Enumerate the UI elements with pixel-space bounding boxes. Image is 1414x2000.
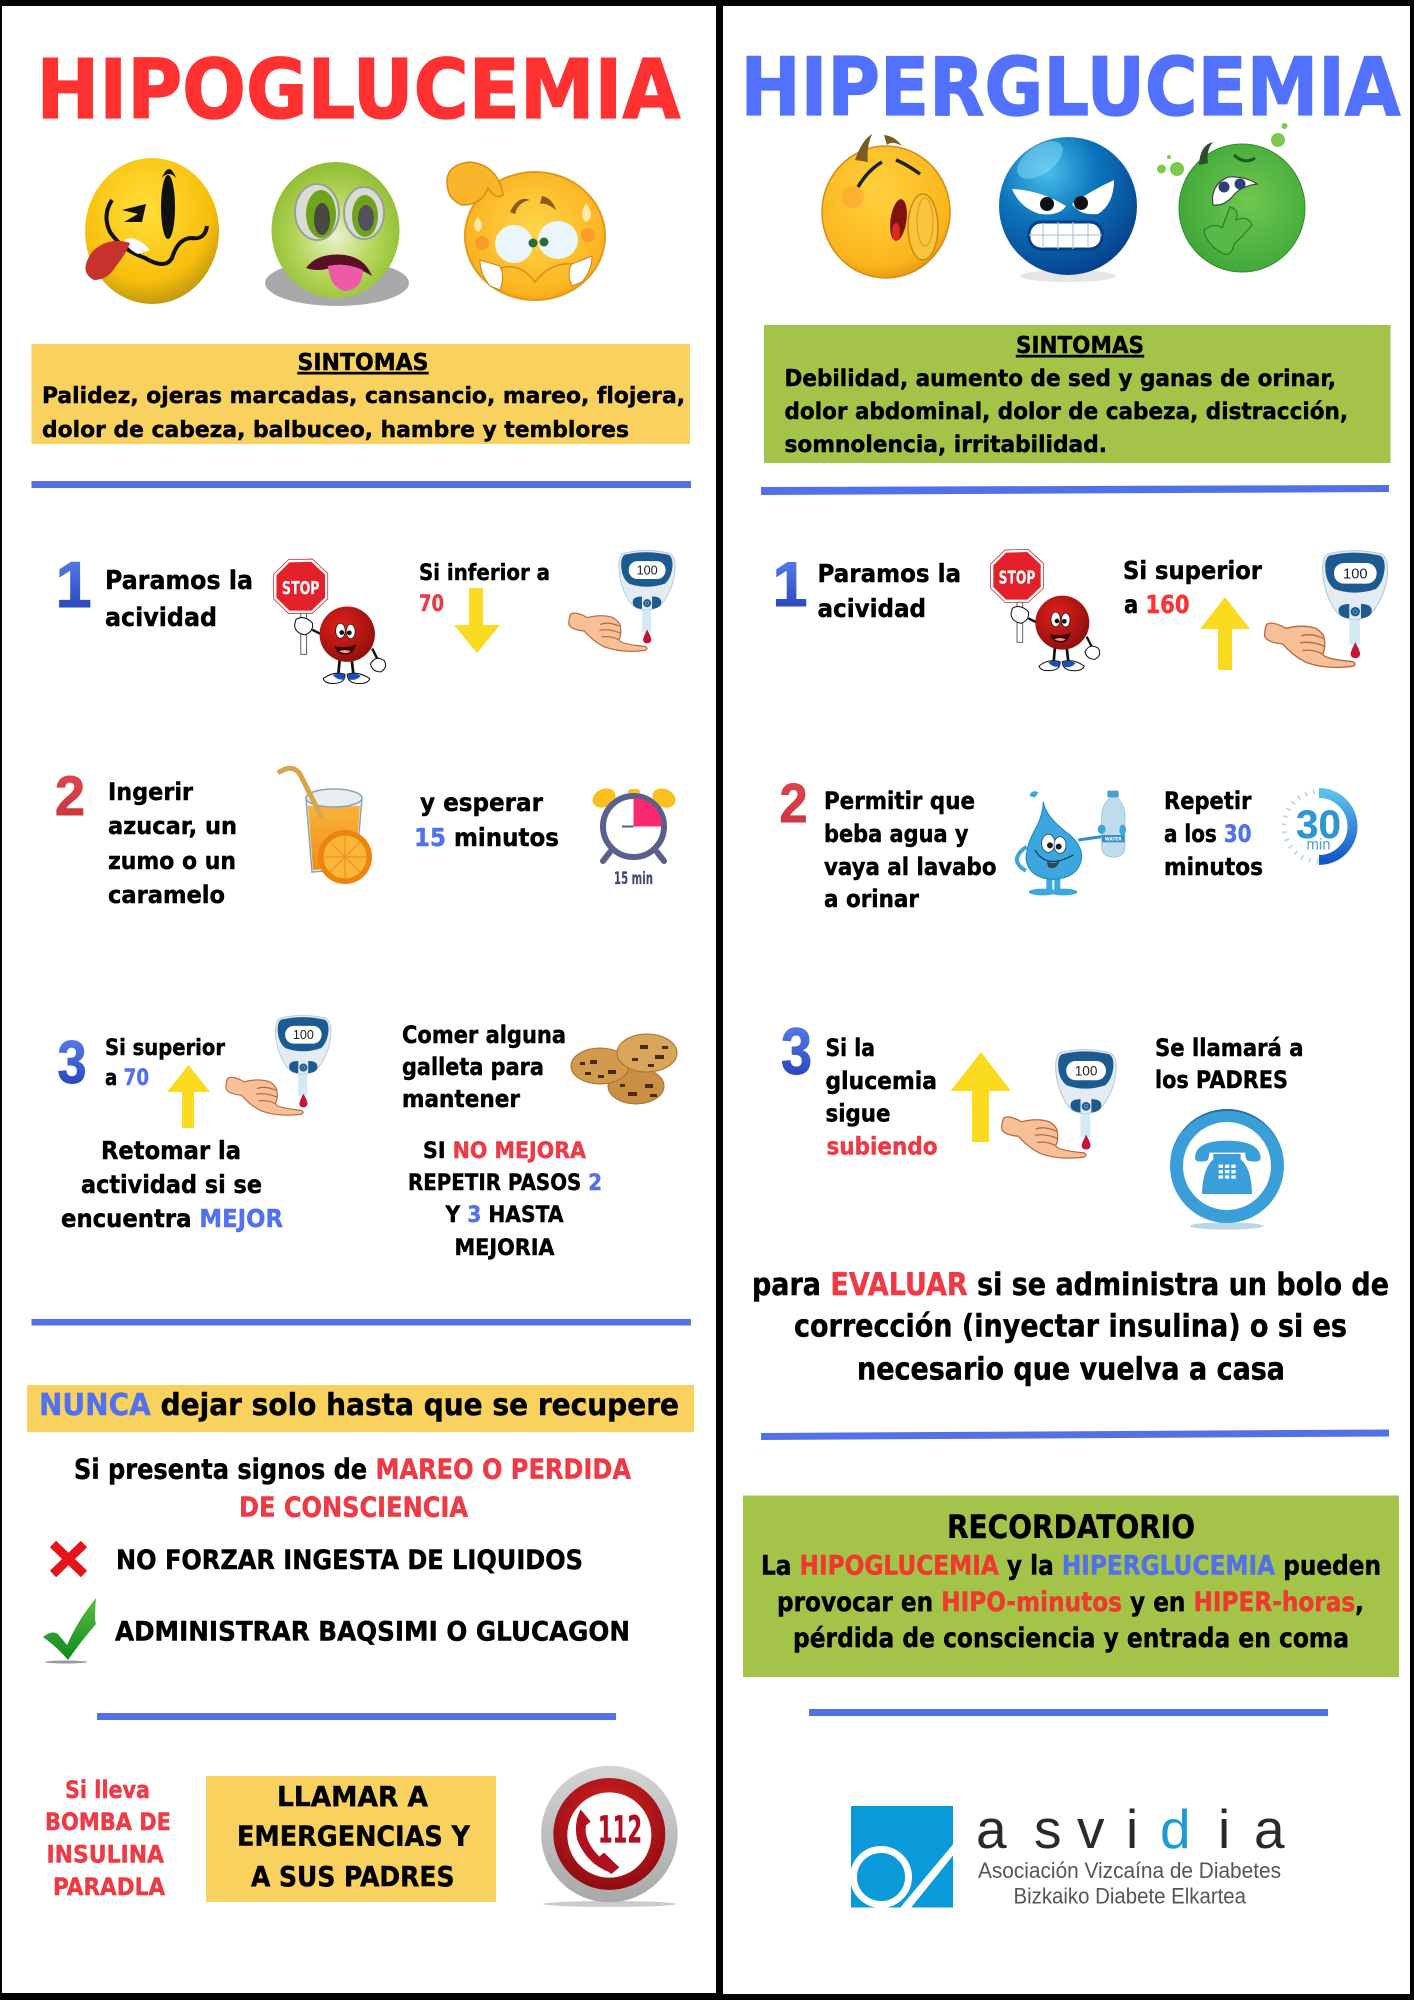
icon: alarm clock 15 min — [589, 785, 679, 889]
text: symptoms list: Debilidad, aumento de sed y ganas de orinar, — [784, 366, 1336, 392]
text: si no mejora repetir pasos: REPETIR PASOS 2 — [408, 1171, 602, 1196]
text: si la glucemia sigue subiendo: subiendo — [826, 1132, 938, 1160]
text: y esperar 15 minutos: y esperar — [420, 788, 544, 817]
icon: emoji yawning — [822, 134, 950, 278]
icon: glucose meter — [226, 1015, 331, 1115]
icon: glucose meter: 100 — [1343, 566, 1368, 582]
icon: emoji worried sweating — [447, 162, 605, 300]
text: signos de mareo: DE CONSCIENCIA — [239, 1490, 468, 1524]
text: si la glucemia sigue subiendo: Si la — [826, 1034, 875, 1062]
text: step 1 parar: Paramos la — [105, 566, 253, 596]
text: si no mejora repetir pasos — [408, 1139, 602, 1261]
callout: nunca dejar solo: NUNCA dejar solo hasta que se recupere — [39, 1388, 679, 1423]
text: comer galleta — [402, 1021, 566, 1113]
text: bomba de insulina: BOMBA DE — [45, 1808, 171, 1836]
text: y esperar 15 minutos: 15 minutos — [414, 823, 559, 852]
icon: number 1: 1 — [772, 550, 808, 620]
heading: sintomas: SINTOMAS — [1016, 333, 1144, 359]
text: si no mejora repetir pasos: MEJORIA — [454, 1236, 554, 1261]
icon: glucose meter — [1002, 1050, 1116, 1158]
text: retomar la actividad: actividad si se — [81, 1170, 262, 1199]
text: bomba de insulina: PARADLA — [53, 1873, 165, 1901]
text: si superior a 70 — [105, 1036, 225, 1091]
text: step 1 parar: acividad — [105, 603, 217, 633]
icon: blue telephone — [1170, 1109, 1284, 1230]
text: si la glucemia sigue subiendo: glucemia — [826, 1067, 937, 1095]
text: signos de mareo — [74, 1452, 631, 1524]
text: repetir a los 30 minutos: minutos — [1164, 853, 1263, 881]
icon: glucose meter — [569, 550, 675, 651]
text: administrar baqsimi: ADMINISTRAR BAQSIMI O GLUCAGON — [115, 1616, 630, 1648]
text: para evaluar bolo de correccion — [752, 1267, 1389, 1388]
text: si inferior a 70 — [419, 561, 550, 617]
icon: 112 emergency button — [541, 1766, 678, 1907]
icon: glucose meter: 100 — [1075, 1063, 1098, 1078]
panel: hiperglucemia — [723, 6, 1410, 1994]
text: se llamara a los padres — [1155, 1034, 1304, 1094]
text: recordatorio body — [761, 1550, 1381, 1654]
icon: emoji angry blue — [999, 134, 1137, 282]
icon: 30 min timer — [1284, 792, 1354, 862]
text: para evaluar bolo de correccion: necesario que vuelva a casa — [857, 1352, 1285, 1388]
panel: sintomas hipoglucemia — [32, 344, 690, 444]
logo: asvidia — [851, 1798, 1285, 1909]
text: recordatorio body: La HIPOGLUCEMIA y la HIPERGLUCEMIA pueden — [761, 1550, 1381, 1582]
text: step 2 ingerir: azucar, un — [108, 812, 237, 840]
callout: llamar a emergencias: EMERGENCIAS Y — [237, 1820, 471, 1852]
title: hipoglucemia: HIPOGLUCEMIA — [36, 43, 681, 138]
icon: water drop character: WATER — [1105, 837, 1122, 843]
icon: number 3: 3 — [58, 1029, 86, 1096]
text: symptoms list: dolor abdominal, dolor de cabeza, distracción, — [784, 399, 1348, 425]
icon: stop character: STOP — [999, 568, 1035, 588]
icon: asvidia mark — [851, 1806, 955, 1909]
callout: llamar a emergencias: LLAMAR A — [277, 1780, 428, 1813]
arrow: up yellow — [1200, 597, 1250, 670]
text: si no mejora repetir pasos: Y 3 HASTA — [445, 1203, 564, 1228]
text: signos de mareo: Si presenta signos de MAREO O PERDIDA — [74, 1452, 631, 1486]
arrow: up yellow — [950, 1052, 1011, 1142]
text: retomar la actividad — [61, 1136, 283, 1233]
icon: stop character — [991, 549, 1100, 671]
text: recordatorio body: provocar en HIPO-minutos y en HIPER-horas, — [777, 1587, 1364, 1618]
text: step 2 ingerir — [108, 778, 237, 909]
arrow: up yellow — [167, 1065, 210, 1128]
text: si la glucemia sigue subiendo: sigue — [826, 1100, 890, 1128]
icon: water drop character — [1017, 791, 1126, 895]
text: si superior a 160: Si superior — [1123, 556, 1263, 585]
panel: hipoglucemia — [2, 6, 716, 1993]
text: repetir a los 30 minutos: Repetir — [1164, 787, 1252, 815]
text: step 2 beber agua: vaya al lavabo — [824, 853, 996, 881]
callout: llamar a emergencias: A SUS PADRES — [251, 1860, 454, 1893]
text: step 1 parar — [818, 559, 961, 623]
text: bomba de insulina: Si lleva — [65, 1776, 150, 1804]
icon: number 2: 2 — [55, 764, 85, 827]
text: bomba de insulina — [45, 1776, 171, 1901]
text: no forzar: NO FORZAR INGESTA DE LIQUIDOS — [116, 1545, 583, 1576]
text: comer galleta: galleta para — [402, 1053, 544, 1081]
text: y esperar 15 minutos — [414, 788, 559, 852]
text: repetir a los 30 minutos — [1164, 787, 1263, 881]
icon: cookies — [571, 1034, 677, 1104]
arrow: down yellow — [454, 588, 500, 653]
heading: recordatorio: RECORDATORIO — [947, 1508, 1195, 1546]
text: para evaluar bolo de correccion: corrección (inyectar insulina) o si es — [794, 1308, 1347, 1344]
icon: number 1: 1 — [56, 548, 92, 621]
icon: alarm clock 15 min: 15 min — [614, 869, 653, 889]
text: bizkaiko diabete: Bizkaiko Diabete Elkartea — [1014, 1884, 1247, 1908]
text: step 2 ingerir: caramelo — [108, 881, 225, 909]
text: symptoms list — [42, 383, 685, 443]
text: si superior a 160: a 160 — [1124, 590, 1190, 619]
icon: emoji tongue out — [85, 158, 219, 304]
icon: emoji nauseous green — [1157, 123, 1305, 272]
icon: number 3: 3 — [781, 1014, 812, 1088]
icon: 112 emergency button: 112 — [598, 1807, 642, 1851]
text: step 1 parar — [105, 566, 253, 633]
text: si superior a 70: a 70 — [105, 1066, 149, 1091]
text: si superior a 70: Si superior — [105, 1036, 225, 1061]
text: step 2 ingerir: zumo o un — [108, 847, 236, 875]
text: step 2 ingerir: Ingerir — [108, 778, 193, 806]
icon: 30 min timer: min — [1306, 836, 1330, 854]
text: step 1 parar: Paramos la — [818, 559, 961, 588]
icon: stop character: STOP — [282, 578, 320, 599]
text: comer galleta: mantener — [402, 1085, 520, 1113]
text: step 2 beber agua — [824, 787, 996, 913]
icon: orange juice — [278, 768, 372, 884]
icon: glucose meter: 100 — [637, 563, 658, 577]
text: comer galleta: Comer alguna — [402, 1021, 566, 1049]
text: step 2 beber agua: Permitir que — [824, 787, 975, 815]
text: si no mejora repetir pasos: SI NO MEJORA — [423, 1139, 586, 1164]
text: step 2 beber agua: beba agua y — [824, 820, 969, 848]
icon: number 2: 2 — [780, 772, 808, 834]
text: asvidia wordmark: asvi d ia — [976, 1798, 1285, 1860]
text: retomar la actividad: Retomar la — [101, 1136, 241, 1165]
text: si inferior a 70: Si inferior a — [419, 561, 550, 586]
text: se llamara a los padres: Se llamará a — [1155, 1034, 1304, 1062]
panel: sintomas hiperglucemia — [764, 325, 1390, 463]
icon: glucose meter: 100 — [293, 1028, 314, 1042]
icon: 30 min timer: 30 — [1296, 803, 1341, 847]
icon: glucose meter — [1265, 551, 1388, 667]
callout: llamar a emergencias — [206, 1776, 496, 1902]
text: se llamara a los padres: los PADRES — [1155, 1066, 1288, 1094]
text: symptoms list: somnolencia, irritabilidad. — [784, 432, 1107, 458]
icon: red cross — [53, 1544, 84, 1574]
icon: emoji green dizzy — [265, 162, 409, 306]
text: si superior a 160 — [1123, 556, 1263, 619]
text: si inferior a 70: 70 — [419, 592, 444, 617]
callout: recordatorio — [743, 1496, 1399, 1677]
text: symptoms list: dolor de cabeza, balbuceo, hambre y temblores — [42, 417, 629, 443]
text: retomar la actividad: encuentra MEJOR — [61, 1204, 283, 1233]
icon: green check — [43, 1598, 96, 1664]
heading: sintomas: SINTOMAS — [298, 350, 428, 376]
text: bomba de insulina: INSULINA — [46, 1840, 164, 1868]
text: step 2 beber agua: a orinar — [824, 885, 919, 913]
icon: stop character — [274, 559, 386, 684]
text: symptoms list — [784, 366, 1348, 458]
text: step 1 parar: acividad — [818, 594, 926, 623]
text: repetir a los 30 minutos: a los 30 — [1164, 820, 1252, 848]
text: asociacion vizcaina: Asociación Vizcaína de Diabetes — [978, 1858, 1281, 1883]
text: symptoms list: Palidez, ojeras marcadas, cansancio, mareo, flojera, — [42, 383, 685, 409]
text: si la glucemia sigue subiendo — [826, 1034, 938, 1160]
